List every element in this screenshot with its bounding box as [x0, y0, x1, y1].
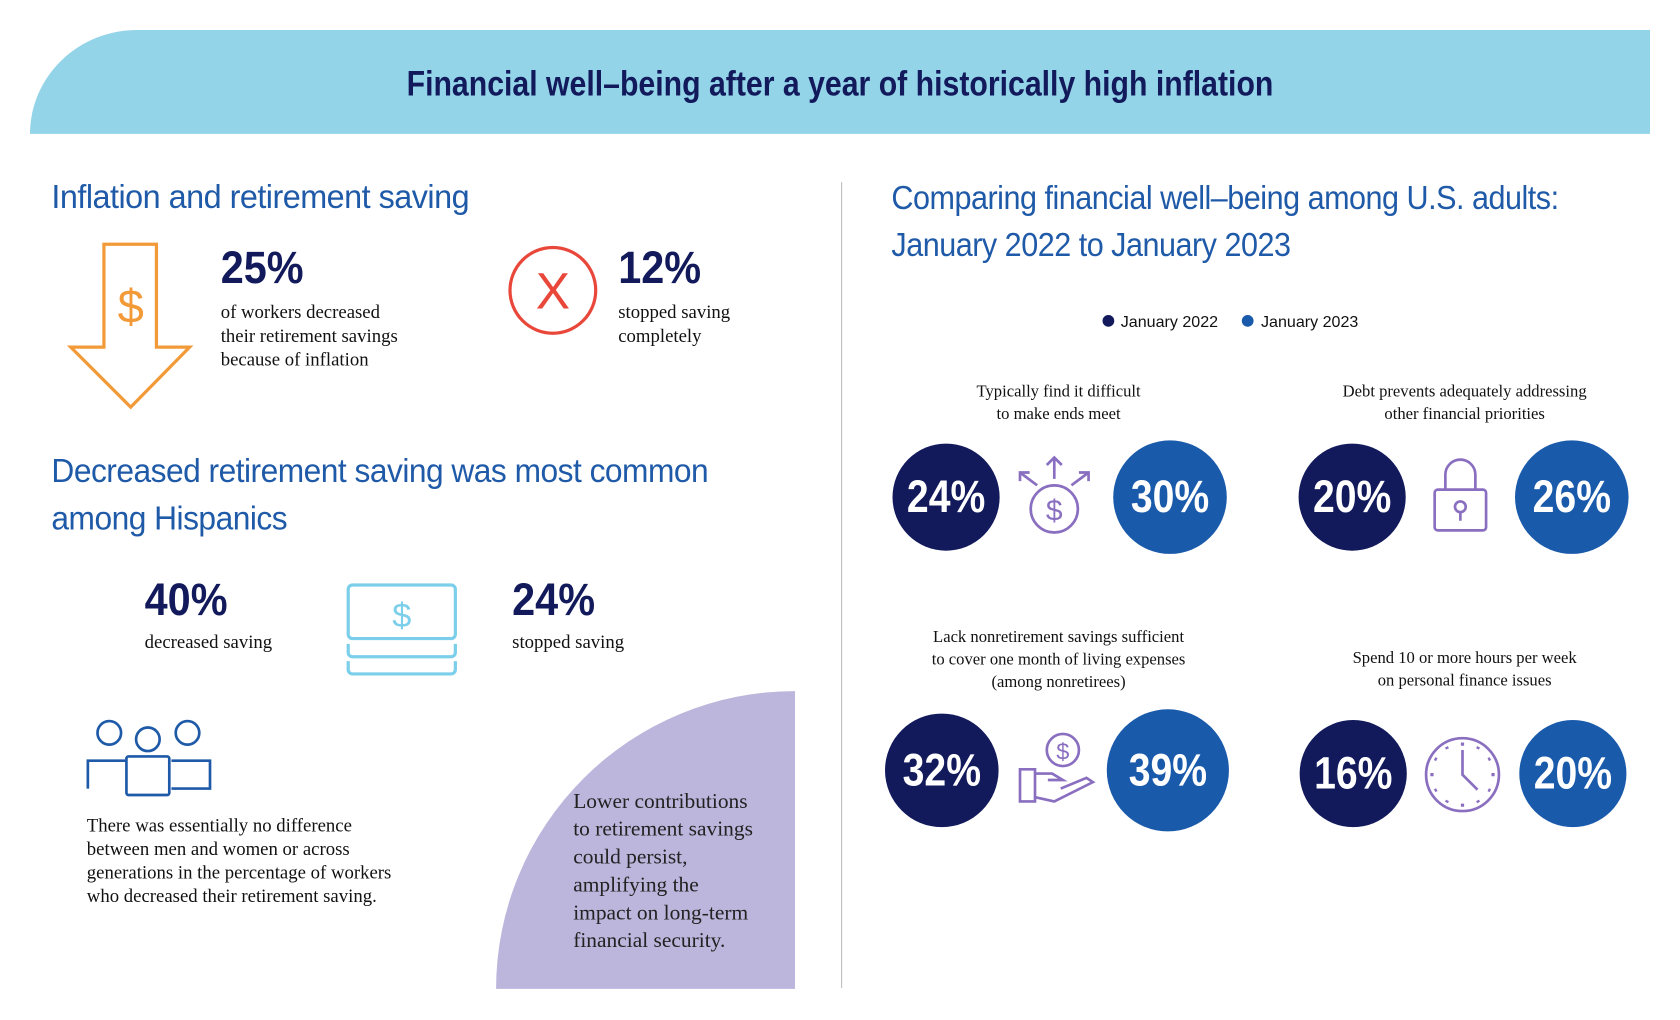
stat 40%: 40%: [145, 574, 228, 625]
callout text: amplifying the: [573, 873, 699, 897]
header banner: [30, 30, 1650, 134]
panel: ends meet: $: [1046, 495, 1063, 528]
panel: savings one month: to cover one month of living expenses: [932, 650, 1185, 669]
heading: Hispanics: [51, 452, 708, 537]
stat 25%: of workers decreased: [221, 301, 380, 323]
callout text: Lower contributions: [573, 790, 748, 813]
heading: comparing: [891, 179, 1559, 264]
stat 40%: [145, 574, 272, 653]
text: no difference: [86, 814, 391, 906]
icon: orange down arrow: $: [118, 280, 144, 333]
heading: comparing: January 2022 to January 2023: [891, 226, 1290, 264]
icon: orange down arrow: [66, 242, 194, 410]
panel: hours per week: 16%: [1314, 748, 1392, 798]
stat 25%: [220, 242, 398, 370]
text: no difference: generations in the percentage of workers: [87, 861, 391, 883]
icon: red X circle: [508, 246, 598, 335]
panel: hours per week: 20%: [1534, 748, 1612, 798]
panel: hours per week: on personal finance issues: [1378, 672, 1552, 690]
panel: savings one month: 39%: [1129, 745, 1207, 795]
panel: ends meet: to make ends meet: [997, 405, 1121, 423]
panel: savings one month: [885, 628, 1229, 832]
heading: inflation and retirement saving: Inflation and retirement saving: [51, 178, 469, 215]
heading: comparing: Comparing financial well–being among U.S. adults:: [891, 179, 1559, 216]
stat 12%: [618, 242, 730, 346]
title: Financial well–being after a year of historically high inflation: [407, 63, 1273, 103]
panel: ends meet: [892, 383, 1227, 554]
panel: debt: Debt prevents adequately addressing: [1343, 383, 1587, 401]
stat 24%: 24%: [512, 574, 595, 625]
panel: savings one month: 32%: [903, 745, 981, 795]
panel: debt: 26%: [1533, 471, 1611, 522]
heading: Hispanics: Decreased retirement saving was most common: [51, 452, 708, 490]
stat 12%: 12%: [618, 242, 701, 293]
panel: debt: other financial priorities: [1384, 405, 1545, 423]
stat 12%: completely: [618, 325, 702, 346]
panel: savings one month: (among nonretirees): [991, 673, 1126, 691]
stat 24%: [512, 574, 624, 653]
stat 12%: stopped saving: [618, 301, 730, 323]
heading: Hispanics: among Hispanics: [51, 499, 287, 537]
callout text: [573, 790, 753, 953]
icon: money stack: $: [392, 597, 411, 635]
callout text: to retirement savings: [573, 818, 753, 841]
callout: purple: [496, 691, 795, 989]
icon: money stack: [346, 583, 457, 676]
panel: debt: 20%: [1313, 471, 1391, 522]
stat 40%: decreased saving: [145, 631, 272, 653]
icon: red X circle: X: [536, 262, 570, 320]
stat 25%: because of inflation: [221, 348, 369, 370]
panel: ends meet: 30%: [1131, 471, 1209, 522]
panel: savings one month: $: [1056, 739, 1069, 765]
stat 25%: 25%: [221, 242, 304, 293]
text: no difference: between men and women or across: [87, 838, 350, 859]
text: no difference: There was essentially no difference: [87, 814, 352, 836]
panel: ends meet: 24%: [907, 471, 985, 522]
panel: hours per week: Spend 10 or more hours per week: [1353, 649, 1577, 668]
icon: people: [86, 720, 212, 796]
callout text: impact on long-term: [573, 901, 748, 925]
callout text: financial security.: [573, 929, 725, 953]
callout text: could persist,: [573, 845, 687, 869]
legend: January 2022 January 2023: [1121, 313, 1358, 331]
panel: debt: [1298, 383, 1629, 554]
text: no difference: who decreased their retirement saving.: [87, 885, 377, 906]
panel: hours per week: [1300, 649, 1626, 828]
panel: ends meet: Typically find it difficult: [977, 383, 1141, 401]
stat 25%: their retirement savings: [221, 325, 398, 346]
panel: savings one month: Lack nonretirement savings sufficient: [933, 628, 1184, 646]
stat 24%: stopped saving: [512, 631, 624, 653]
